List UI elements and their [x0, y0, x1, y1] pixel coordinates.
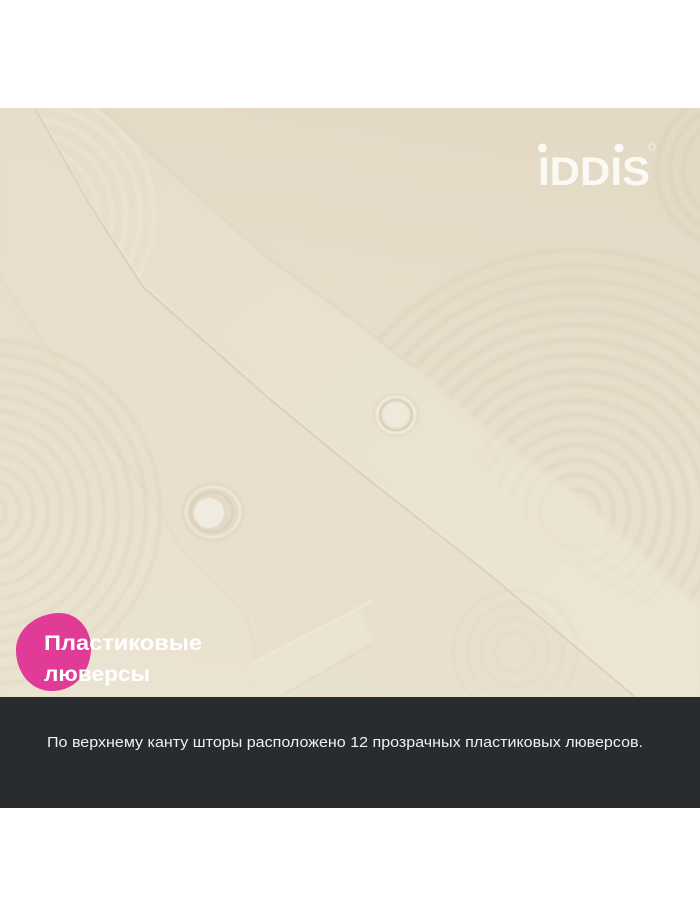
- pattern: rings under the right hem: [465, 400, 689, 624]
- fold: left flap edge: [0, 277, 257, 660]
- icon: small plastic grommet: [374, 395, 420, 436]
- panel: dark caption bar: [0, 697, 700, 808]
- fold: lower flap seams: [253, 600, 372, 695]
- accent: pink blob: [16, 613, 91, 691]
- caption text: По верхнему канту шторы расположено 12 прозрачных пластиковых люверсов.: [47, 734, 643, 751]
- pattern: concentric rings left: [0, 598, 118, 684]
- logo: IDDIS: IDDIS: [538, 150, 650, 194]
- pattern: concentric rings lower center: [453, 590, 577, 714]
- pattern: concentric rings upper left: [0, 91, 154, 339]
- icon: large plastic grommet: [185, 486, 244, 538]
- pattern: concentric rings top right: [657, 92, 700, 248]
- heading: люверсы: [44, 663, 150, 686]
- photo: curtain fabric: [0, 108, 700, 697]
- heading: Пластиковые: [44, 632, 202, 655]
- seam: main stitched line: [35, 108, 638, 697]
- fold: hem upper edge: [16, 613, 91, 691]
- hem: lighter folded band: [35, 108, 700, 697]
- lower curtain layer: [0, 108, 635, 697]
- lower flap band: [253, 608, 372, 697]
- heading: [44, 632, 202, 686]
- pattern: large concentric rings on the right: [500, 411, 700, 596]
